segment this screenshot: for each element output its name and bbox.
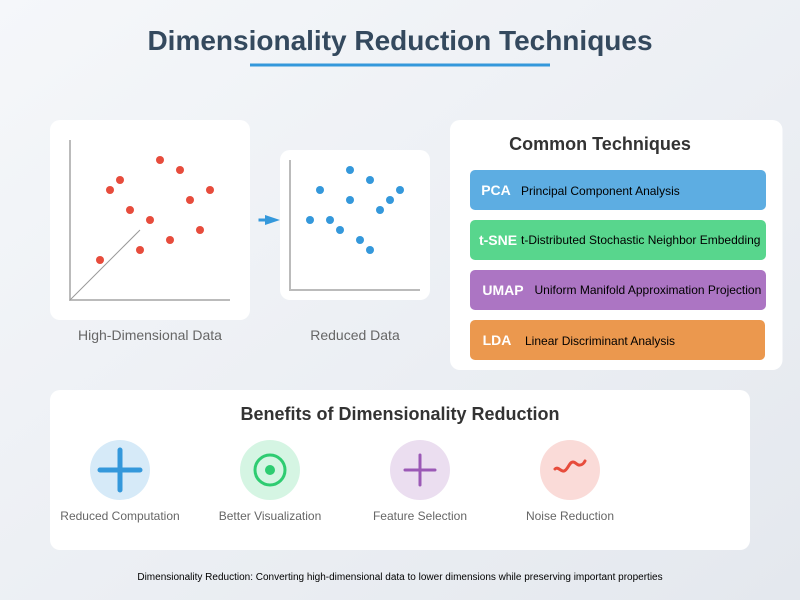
axes bbox=[70, 140, 230, 300]
panel: benefits bbox=[50, 390, 750, 550]
benefit: noise reduction bbox=[526, 440, 614, 523]
panel: high-dimensional data bbox=[50, 120, 250, 320]
technique: LDA: LDA bbox=[483, 332, 511, 348]
technique: UMAP bbox=[470, 270, 766, 310]
red data points bbox=[96, 156, 214, 264]
benefit: reduced computation bbox=[60, 440, 180, 523]
technique: t-SNE: t-SNE bbox=[479, 232, 517, 248]
axes bbox=[290, 160, 420, 290]
panel: reduced data bbox=[280, 150, 430, 300]
technique: PCA: Principal Component Analysis bbox=[521, 184, 680, 198]
blue data points bbox=[306, 166, 404, 254]
technique: LDA: Linear Discriminant Analysis bbox=[525, 334, 675, 348]
depth axis bbox=[70, 230, 140, 300]
benefit: better visualization: Better Visualization bbox=[219, 509, 321, 523]
benefit: feature selection bbox=[373, 440, 467, 523]
technique: UMAP: UMAP bbox=[482, 282, 524, 298]
benefit: better visualization bbox=[219, 440, 321, 523]
arrow bbox=[258, 215, 280, 225]
footer note: Dimensionality Reduction: Converting high-dimensional data to lower dimensions while preserving important properties bbox=[137, 572, 663, 583]
benefit: noise reduction: Noise Reduction bbox=[526, 509, 614, 523]
heading: common techniques: Common Techniques bbox=[509, 134, 691, 154]
panel: common techniques bbox=[450, 120, 782, 370]
benefit: feature selection: Feature Selection bbox=[373, 509, 467, 523]
heading: benefits: Benefits of Dimensionality Reduction bbox=[240, 404, 560, 424]
technique: t-SNE: t-Distributed Stochastic Neighbor Embedding bbox=[521, 233, 760, 247]
technique: PCA: PCA bbox=[481, 182, 511, 198]
technique: PCA bbox=[470, 170, 766, 210]
title: Dimensionality Reduction Techniques bbox=[147, 25, 653, 56]
benefit: reduced computation: Reduced Computation bbox=[60, 509, 180, 523]
technique: t-SNE bbox=[470, 220, 766, 260]
label: high-dimensional data: High-Dimensional Data bbox=[78, 327, 222, 343]
technique: UMAP: Uniform Manifold Approximation Projection bbox=[534, 283, 761, 297]
technique: LDA bbox=[470, 320, 765, 360]
title underline bbox=[250, 64, 550, 66]
label: reduced data: Reduced Data bbox=[310, 327, 400, 343]
